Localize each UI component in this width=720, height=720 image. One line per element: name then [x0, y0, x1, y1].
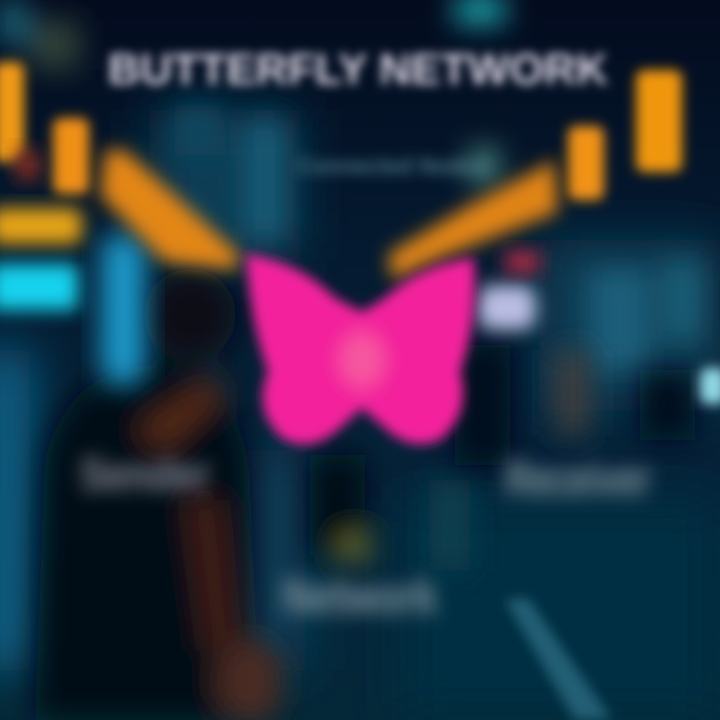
label: bottom node: Network [282, 568, 438, 626]
arrow: left orange beam to butterfly [100, 150, 240, 270]
icon: pink butterfly [246, 254, 475, 445]
right side crowd silhouettes [310, 345, 695, 562]
left neon signs [0, 62, 144, 385]
foreground figure silhouette [35, 269, 284, 720]
label: right node: Receiver [506, 451, 650, 507]
right neon signs [478, 70, 720, 404]
label: left node: Sender [80, 448, 210, 500]
road marking [505, 598, 612, 720]
arrow: right orange beam to butterfly [388, 160, 558, 280]
subtitle: Connected Nodes [297, 153, 487, 180]
title: BUTTERFLY NETWORK [108, 45, 608, 94]
